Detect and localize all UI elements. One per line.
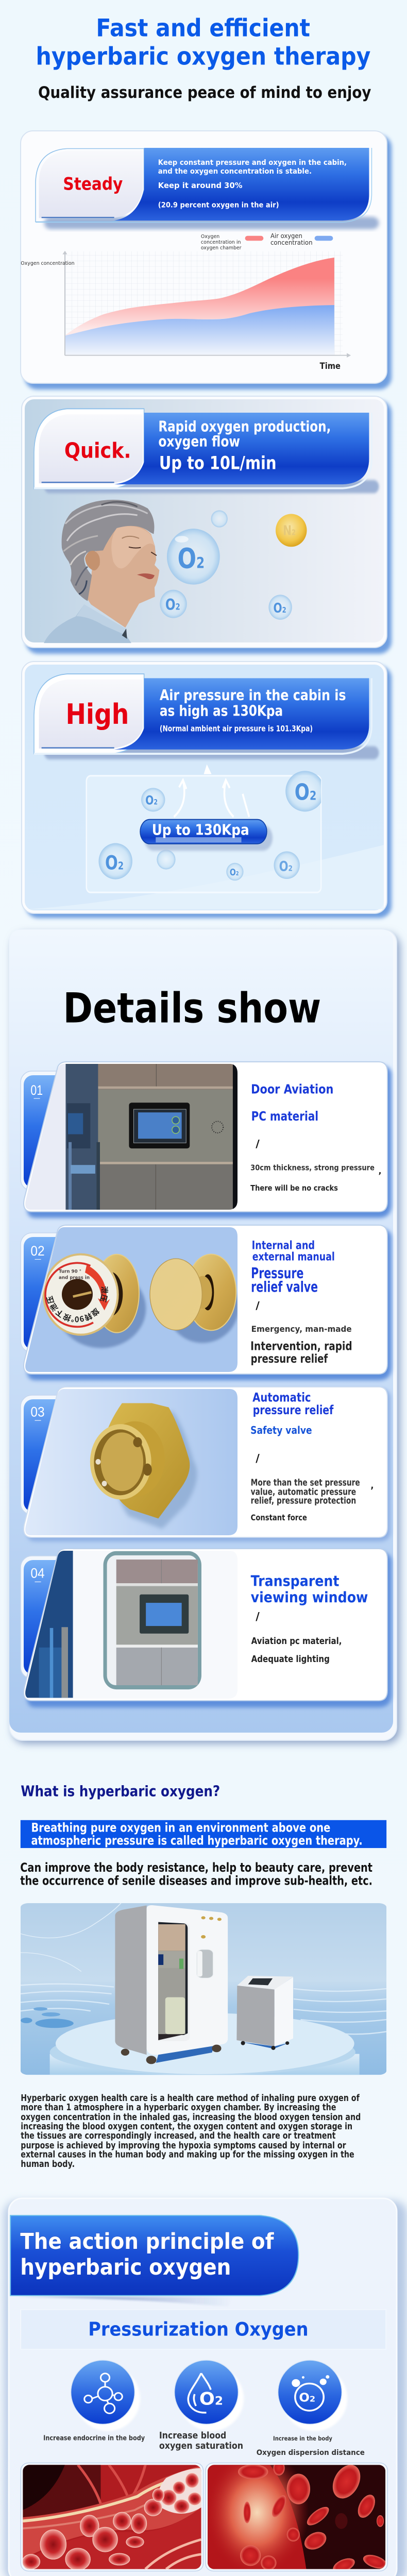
text: safety valve: More than the set pressure <box>251 1477 360 1488</box>
pressure relief knobs: 泄压 旋转90°按下泄压 <box>46 1286 108 1322</box>
pressure relief knobs: Turn 90 ° <box>59 1269 81 1275</box>
text: door aviation: PC material <box>251 1109 318 1124</box>
card 02: 02 <box>30 1243 45 1259</box>
text: door aviation: 30cm thickness, strong pressure <box>250 1163 375 1172</box>
text: safety valve: pressure relief <box>253 1403 334 1417</box>
card 03: 03 <box>30 1404 45 1420</box>
oxygen bubbles: O2 <box>105 852 124 874</box>
panel: details show <box>7 928 405 1749</box>
blue definition box <box>21 1820 386 1848</box>
banner: high: High <box>65 698 129 731</box>
banner: steady: (20.9 percent oxygen in the air) <box>158 201 279 210</box>
text: safety valve: / <box>256 1452 260 1464</box>
text: pressure relief valve: Emergency, man-made <box>251 1324 352 1334</box>
banner: quick: Rapid oxygen production, <box>158 418 331 435</box>
text: pressure relief valve: Intervention, rapid <box>250 1340 352 1353</box>
paragraph: hyperbaric oxygen health care: increasing the blood oxygen content, the oxygen content and oxygen storage in <box>21 2121 352 2131</box>
text: pressure relief valve: external manual <box>252 1250 335 1263</box>
text: pressure relief valve: / <box>256 1299 260 1312</box>
text: safety valve: relief, pressure protection <box>251 1495 356 1506</box>
banner: steady: Steady <box>63 174 123 194</box>
card 04 <box>21 1548 392 1707</box>
text: safety valve: value, automatic pressure <box>251 1486 356 1497</box>
panel: quick <box>22 396 392 654</box>
banner: quick <box>34 409 379 493</box>
paragraph: hyperbaric oxygen health care: more than 1 atmosphere in a hyperbaric oxygen chamber. By increasing the <box>21 2102 336 2112</box>
pressure relief knobs <box>25 1227 238 1372</box>
paragraph: hyperbaric oxygen health care: external causes in the human body and making up for the missing oxygen in the <box>21 2149 354 2160</box>
banner: quick: Quick. <box>64 438 131 463</box>
banner: action principle: hyperbaric oxygen <box>20 2255 231 2280</box>
text: pressure relief valve: relief valve <box>251 1278 318 1296</box>
text: viewing window: / <box>256 1610 260 1623</box>
heading: what is hyperbaric oxygen: What is hyperbaric oxygen? <box>21 1784 220 1800</box>
woman breathing <box>44 500 159 643</box>
oxygen bubbles: O2 <box>279 858 293 874</box>
viewing window <box>25 1551 201 1698</box>
text: pressure relief valve: Internal and <box>252 1239 315 1252</box>
text: viewing window: Aviation pc material, <box>251 1635 342 1646</box>
text: safety valve <box>250 1391 374 1522</box>
banner: high: as high as 130Kpa <box>160 703 283 719</box>
banner: quick: oxygen flow <box>158 433 240 450</box>
icon labels <box>43 2431 365 2457</box>
icon labels: Increase blood <box>159 2431 226 2441</box>
legend: concentration <box>270 239 313 246</box>
section: what is hyperbaric oxygen <box>20 1784 386 2169</box>
text: door aviation: , <box>379 1166 382 1176</box>
icon: oxygen bubble <box>278 2360 347 2431</box>
panel: action principle <box>4 2198 407 2576</box>
text: pressure relief valve: pressure relief <box>251 1352 328 1366</box>
oxygen bubbles: O2 <box>230 867 239 877</box>
legend: Air oxygen <box>270 232 302 240</box>
legend: concentration in <box>201 240 241 245</box>
product image: chamber on platform <box>21 1903 386 2075</box>
text: viewing window <box>251 1573 368 1664</box>
paragraph: hyperbaric oxygen health care: Hyperbaric oxygen health care is a health care method of inhaling pure oxygen of <box>21 2093 360 2103</box>
pill: up to 130Kpa <box>140 820 273 851</box>
legend <box>201 232 333 251</box>
oxygen bubbles: O2 <box>178 543 205 575</box>
text: door aviation: / <box>256 1138 260 1150</box>
icon: oxygen bubble: O2 <box>299 2391 315 2404</box>
area chart: Time <box>320 361 341 371</box>
card 01 <box>21 1061 392 1218</box>
subheading: pressurization oxygen <box>21 2310 386 2349</box>
title block: Fast and efficient <box>96 14 310 42</box>
paragraph: hyperbaric oxygen health care <box>21 2093 361 2169</box>
text: safety valve: , <box>370 1480 374 1490</box>
banner: steady: Keep constant pressure and oxygen in the cabin, <box>158 159 347 167</box>
banner: high: Air pressure in the cabin is <box>160 687 346 704</box>
icon: oxygen droplet <box>175 2360 244 2431</box>
banner: high: (Normal ambient air pressure is 101.3Kpa) <box>160 724 313 734</box>
banner: steady: Keep it around 30% <box>158 181 243 190</box>
card 02 <box>21 1225 395 1392</box>
text: safety valve: Automatic <box>252 1391 311 1405</box>
paragraph: hyperbaric oxygen health care: human body. <box>21 2159 75 2169</box>
text: door aviation: There will be no cracks <box>250 1183 338 1193</box>
text: safety valve: Safety valve <box>250 1424 312 1436</box>
icon labels: Increase endocrine in the body <box>43 2435 145 2442</box>
oxygen bubbles: O2 <box>165 596 180 614</box>
blue definition box: Breathing pure oxygen in an environment above one <box>31 1821 330 1835</box>
text: pressure relief valve <box>250 1239 352 1366</box>
text: viewing window: Transparent <box>251 1573 339 1590</box>
paragraph: hyperbaric oxygen health care: oxygen concentration in the inhaled gas, increasing the blood oxygen tension and <box>21 2111 361 2122</box>
text: safety valve: Constant force <box>251 1513 307 1522</box>
paragraph: hyperbaric oxygen health care: the tissues are correspondingly increased, and the health care or treatment <box>21 2130 335 2141</box>
oxygen bubbles <box>98 771 325 880</box>
title block <box>36 14 371 102</box>
image: vessel with red blood cells <box>21 2463 203 2571</box>
oxygen bubbles: N2 <box>283 523 296 538</box>
text: door aviation: Door Aviation <box>251 1081 333 1096</box>
card 03 <box>21 1386 391 1541</box>
oxygen bubbles: O2 <box>274 601 286 616</box>
panel: steady <box>21 131 392 389</box>
oxygen bubbles: O2 <box>145 793 158 808</box>
pill: up to 130Kpa: Up to 130Kpa <box>152 822 249 838</box>
legend: oxygen chamber <box>201 245 242 251</box>
card 04: 04 <box>30 1565 45 1581</box>
legend: Oxygen <box>201 234 219 240</box>
oxygen bubbles: O2 <box>295 780 316 805</box>
icon: oxygen droplet: O2 <box>199 2389 223 2409</box>
panel: high <box>22 662 392 918</box>
image: red blood cells microscopic <box>205 2463 388 2572</box>
text: viewing window: viewing window <box>251 1589 368 1606</box>
icon labels: oxygen saturation <box>159 2441 243 2451</box>
icon labels: Increase in the body <box>273 2435 332 2442</box>
heading: details show: Details show <box>63 984 321 1032</box>
card 01: 01 <box>30 1082 43 1098</box>
icon: molecule <box>71 2360 140 2431</box>
text: viewing window: Adequate lighting <box>251 1653 330 1664</box>
banner: quick: Up to 10L/min <box>159 453 277 474</box>
subheading: pressurization oxygen: Pressurization Oxygen <box>88 2318 309 2340</box>
area chart <box>21 251 351 371</box>
paragraph: hyperbaric oxygen health care: purpose is achieved by improving the hypoxia symptoms caused by internal or <box>21 2140 346 2150</box>
benefits text <box>20 1861 372 1888</box>
safety valve <box>21 1386 242 1538</box>
banner: high <box>34 674 379 759</box>
banner: steady: and the oxygen concentration is stable. <box>158 168 312 176</box>
banner: steady <box>36 148 379 229</box>
banner: action principle <box>10 2215 298 2307</box>
pressure frame <box>87 764 321 892</box>
banner: action principle: The action principle of <box>20 2229 274 2255</box>
oxygen bubbles <box>160 510 307 620</box>
door image <box>21 1061 242 1216</box>
area chart: Oxygen concentration <box>21 261 75 266</box>
blue definition box: atmospheric pressure is called hyperbaric oxygen therapy. <box>31 1834 363 1848</box>
text: door aviation <box>250 1081 382 1193</box>
text: pressure relief valve: Pressure <box>251 1265 303 1282</box>
pressure relief knobs: and press in <box>59 1276 90 1281</box>
icon labels: Oxygen dispersion distance <box>257 2448 365 2457</box>
